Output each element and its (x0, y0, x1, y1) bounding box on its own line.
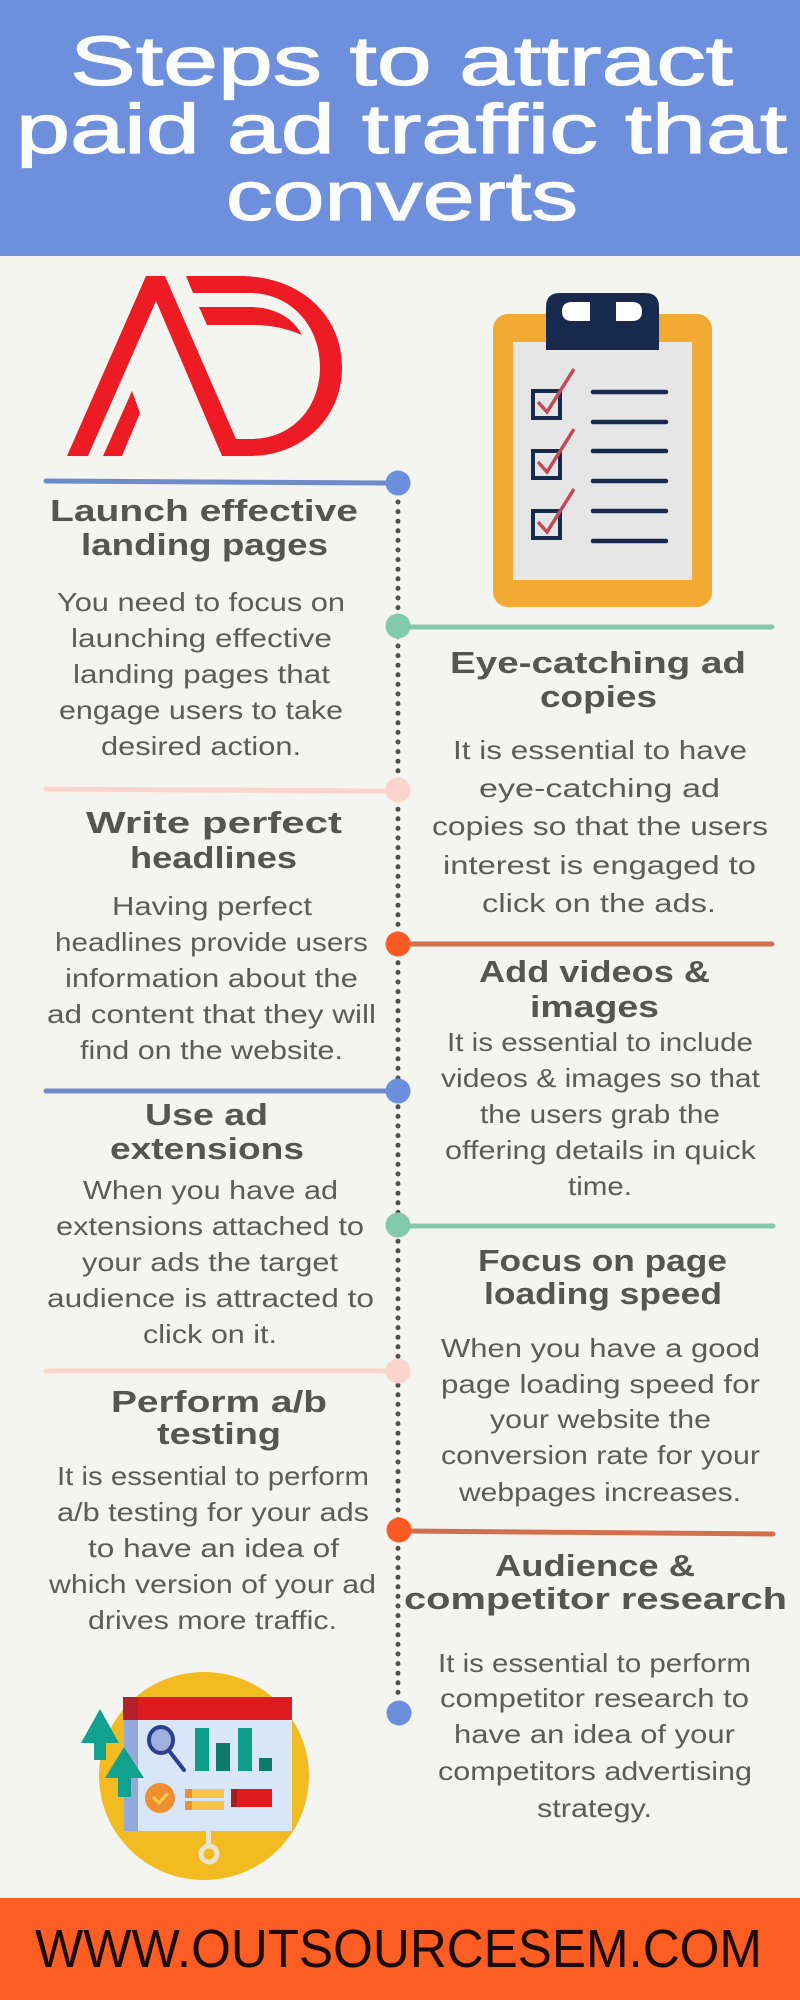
connector and dot (46, 470, 410, 496)
body text: headlines provide users (55, 927, 368, 957)
body text: ad content that they will (47, 999, 376, 1029)
body text: competitor research to (440, 1683, 749, 1713)
timeline end dot (386, 1700, 412, 1726)
body text: When you have ad (83, 1175, 338, 1205)
header banner (0, 0, 800, 256)
heading: Use ad (145, 1097, 268, 1132)
connector and dot (386, 614, 772, 638)
body text (48, 1461, 376, 1635)
logo: AD (67, 276, 342, 456)
body text: interest is engaged to (443, 850, 756, 880)
connector and dot (46, 1078, 410, 1104)
body text: find on the website. (80, 1035, 343, 1065)
title: converts (226, 157, 578, 235)
body text (441, 1027, 761, 1201)
body text: information about the (65, 963, 358, 993)
panel: focus on page loading speed (386, 1212, 773, 1507)
heading: Audience & (495, 1548, 695, 1583)
body text: time. (568, 1171, 632, 1201)
body text: which version of your ad (48, 1569, 376, 1599)
body text: videos & images so that (441, 1063, 761, 1093)
heading: Perform a/b (111, 1384, 327, 1419)
heading: images (530, 989, 659, 1024)
connector and dot (46, 778, 410, 802)
icon: analytics presentation board (81, 1672, 309, 1880)
heading (479, 954, 710, 1024)
heading (450, 645, 746, 714)
heading: Launch effective (50, 493, 358, 528)
heading (111, 1384, 327, 1451)
body text: copies so that the users (432, 811, 768, 841)
body text: drives more traffic. (88, 1605, 337, 1635)
title (16, 22, 787, 235)
heading (110, 1097, 304, 1166)
body text: It is essential to perform (438, 1648, 751, 1678)
body text: extensions attached to (56, 1211, 364, 1241)
body text (432, 735, 768, 918)
body text: Having perfect (112, 891, 313, 921)
body text: landing pages that (73, 659, 331, 689)
panel: use ad extensions (46, 1078, 410, 1349)
heading: Eye-catching ad (450, 645, 746, 680)
body text: have an idea of your (454, 1719, 735, 1749)
connector and dot (386, 1518, 773, 1542)
panel: eye-catching ad copies (386, 614, 772, 918)
title: Steps to attract (70, 22, 733, 100)
body text: click on the ads. (482, 888, 716, 918)
heading: Add videos & (479, 954, 710, 989)
panel: audience and competitor research (386, 1518, 787, 1823)
heading (404, 1548, 787, 1616)
heading (50, 493, 358, 562)
title: paid ad traffic that (16, 90, 787, 168)
heading: competitor research (404, 1581, 787, 1616)
body text: click on it. (143, 1319, 277, 1349)
timeline dotted spine (396, 502, 400, 1694)
body text: eye-catching ad (479, 773, 720, 803)
body text (47, 1175, 374, 1349)
body text: When you have a good (441, 1333, 760, 1363)
body text: conversion rate for your (441, 1440, 760, 1470)
connector and dot (46, 1358, 410, 1384)
heading: testing (157, 1416, 281, 1451)
body text: a/b testing for your ads (57, 1497, 369, 1527)
body text: to have an idea of (88, 1533, 340, 1563)
body text: desired action. (101, 731, 301, 761)
footer banner (0, 1898, 800, 2000)
body text: strategy. (537, 1793, 652, 1823)
body text: offering details in quick (445, 1135, 757, 1165)
body text: competitors advertising (438, 1756, 752, 1786)
panel: add videos and images (386, 932, 772, 1201)
heading: headlines (130, 840, 297, 875)
heading: extensions (110, 1131, 304, 1166)
body text: It is essential to perform (57, 1461, 369, 1491)
body text: audience is attracted to (47, 1283, 374, 1313)
panel: launch effective landing pages (46, 470, 410, 761)
heading: Focus on page (478, 1243, 727, 1278)
body text: your ads the target (82, 1247, 339, 1277)
heading: Write perfect (86, 805, 342, 840)
body text (438, 1648, 752, 1823)
connector and dot (386, 1212, 773, 1238)
heading: loading speed (484, 1276, 722, 1311)
heading (86, 805, 342, 875)
heading: landing pages (81, 527, 328, 562)
connector and dot (386, 932, 772, 956)
body text: launching effective (71, 623, 332, 653)
body text: page loading speed for (441, 1369, 760, 1399)
body text (441, 1333, 760, 1507)
body text: your website the (490, 1404, 711, 1434)
body text (57, 587, 345, 761)
body text: the users grab the (480, 1099, 720, 1129)
body text: webpages increases. (458, 1477, 741, 1507)
heading: copies (540, 679, 657, 714)
body text: It is essential to include (447, 1027, 753, 1057)
body text: You need to focus on (57, 587, 345, 617)
heading (478, 1243, 727, 1311)
footer url: WWW.OUTSOURCESEM.COM (35, 1919, 762, 1979)
body text: It is essential to have (453, 735, 747, 765)
body text: engage users to take (59, 695, 343, 725)
panel: write perfect headlines (46, 778, 410, 1065)
panel: perform a/b testing (46, 1358, 410, 1635)
body text (47, 891, 376, 1065)
icon: clipboard checklist (493, 293, 712, 607)
